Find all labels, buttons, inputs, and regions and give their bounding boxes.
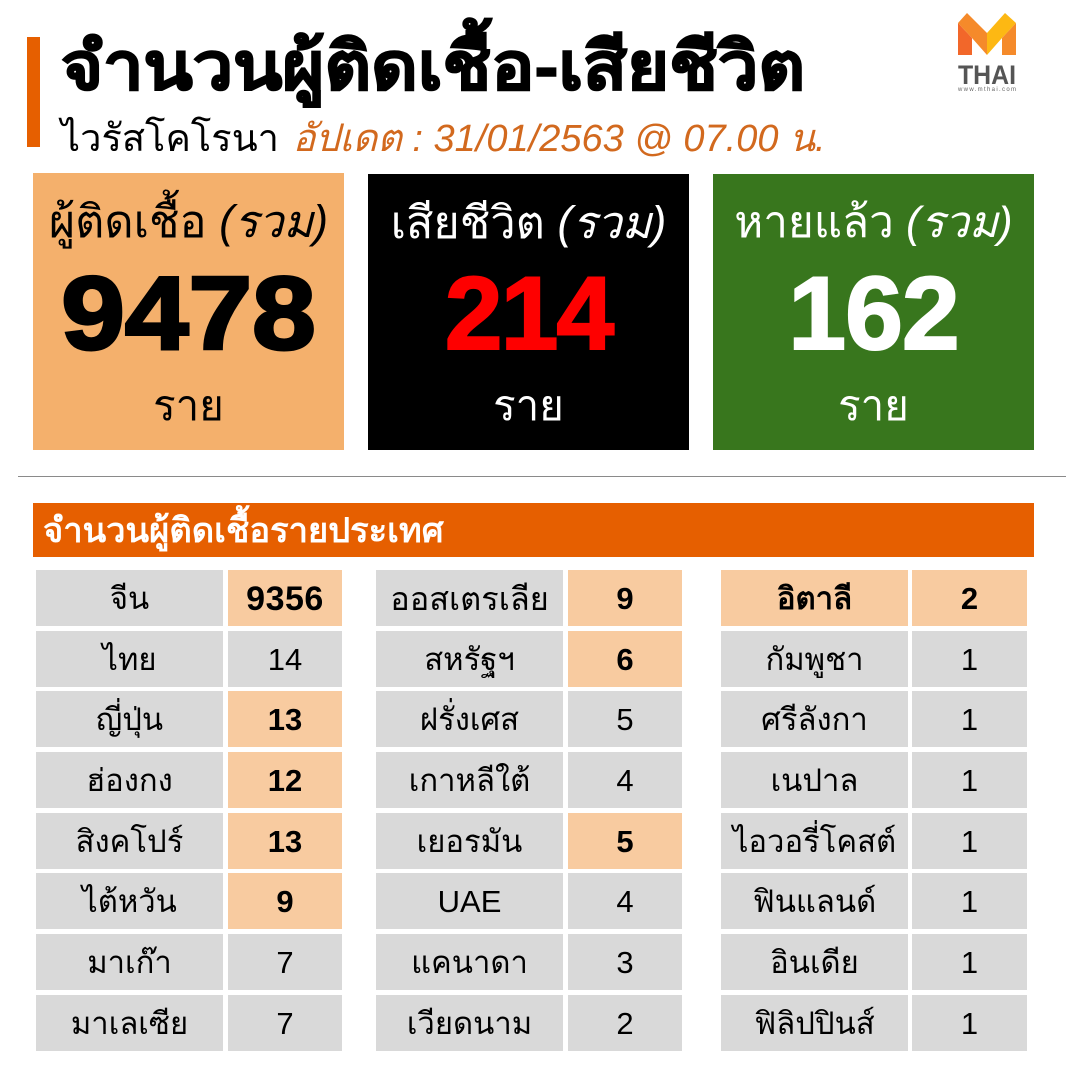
table column 1: 12 <box>268 763 302 798</box>
table column 2: 4 <box>616 763 634 798</box>
table column 3: 1 <box>961 763 978 798</box>
table column 1: สิงคโปร์ <box>76 824 183 859</box>
table column 2: เวียดนาม <box>407 1006 532 1041</box>
table column 1: 7 <box>276 1006 294 1041</box>
table column 1: 7 <box>276 945 294 980</box>
table column 2: 5 <box>616 702 634 737</box>
recovered number: 162 <box>788 256 959 372</box>
table column 1: ไต้หวัน <box>82 884 177 919</box>
recovered unit: ราย <box>838 382 909 429</box>
table column 2: 4 <box>616 884 634 919</box>
table column 3: ฟินแลนด์ <box>753 884 876 919</box>
panel: total recovered <box>713 174 1034 450</box>
table column 3: 1 <box>961 1006 978 1041</box>
table column 2: UAE <box>438 884 501 919</box>
table heading: จำนวนผู้ติดเชื้อรายประเทศ <box>43 512 444 550</box>
deaths number: 214 <box>445 256 612 372</box>
table column 3: 1 <box>961 824 978 859</box>
table column 2: 2 <box>616 1006 634 1041</box>
accent bar <box>27 37 40 147</box>
table column 3: เนปาล <box>771 763 858 798</box>
table column 3: 1 <box>961 884 978 919</box>
table column 1 <box>36 570 342 1051</box>
table column 2: 5 <box>616 824 634 859</box>
table column 2: 3 <box>616 945 634 980</box>
table column 1: ไทย <box>102 642 157 677</box>
table column 2: ฝรั่งเศส <box>420 702 519 737</box>
table column 3: ศรีลังกา <box>761 702 868 737</box>
table column 3: ฟิลิปปินส์ <box>754 1006 875 1041</box>
table column 2: 9 <box>616 581 634 616</box>
table column 3: 1 <box>961 945 978 980</box>
table column 2: 6 <box>616 642 634 677</box>
deaths unit: ราย <box>493 382 564 429</box>
deaths heading: เสียชีวิต (รวม) <box>391 197 666 248</box>
panel: total deaths <box>368 174 689 450</box>
table column 3: ไอวอรี่โคสต์ <box>733 824 896 859</box>
icon: MThai logo: THAI <box>958 60 1016 90</box>
table column 3: กัมพูชา <box>765 642 864 677</box>
table column 2: สหรัฐฯ <box>424 642 515 677</box>
table heading <box>33 503 1034 557</box>
table column 2 <box>376 570 682 1051</box>
table column 3: 1 <box>961 702 978 737</box>
icon: MThai logo: www.mthai.com <box>957 87 1016 93</box>
table column 2: เยอรมัน <box>417 824 522 859</box>
infected number: 9478 <box>61 256 316 372</box>
table column 1: 13 <box>268 702 302 737</box>
infected unit: ราย <box>153 382 224 429</box>
table column 1: จีน <box>110 581 149 616</box>
title: จำนวนผู้ติดเชื้อ-เสียชีวิต <box>61 29 805 103</box>
table column 1: มาเก๊า <box>87 945 172 980</box>
table column 2: เกาหลีใต้ <box>409 763 530 798</box>
table column 1: 9 <box>276 884 294 919</box>
table column 3: อิตาลี <box>777 581 852 616</box>
subtitle: ไวรัสโคโรนา อัปเดต : 31/01/2563 @ 07.00 น. <box>61 118 826 160</box>
table column 1: 13 <box>268 824 302 859</box>
table column 1: มาเลเซีย <box>71 1006 188 1041</box>
table column 3 <box>721 570 1027 1051</box>
table column 2: แคนาดา <box>411 945 528 980</box>
table column 3: 2 <box>961 581 978 616</box>
table column 3: 1 <box>961 642 978 677</box>
panel: total infected <box>33 173 344 450</box>
table column 1: 14 <box>268 642 302 677</box>
table column 1: ญี่ปุ่น <box>96 702 163 737</box>
icon: MThai logo <box>957 13 1016 93</box>
table column 1: 9356 <box>246 580 324 618</box>
table column 3: อินเดีย <box>770 945 859 980</box>
table column 2: ออสเตรเลีย <box>390 581 549 617</box>
table column 1: ฮ่องกง <box>86 763 173 798</box>
recovered heading: หายแล้ว (รวม) <box>734 198 1013 247</box>
infected heading: ผู้ติดเชื้อ (รวม) <box>49 196 328 247</box>
